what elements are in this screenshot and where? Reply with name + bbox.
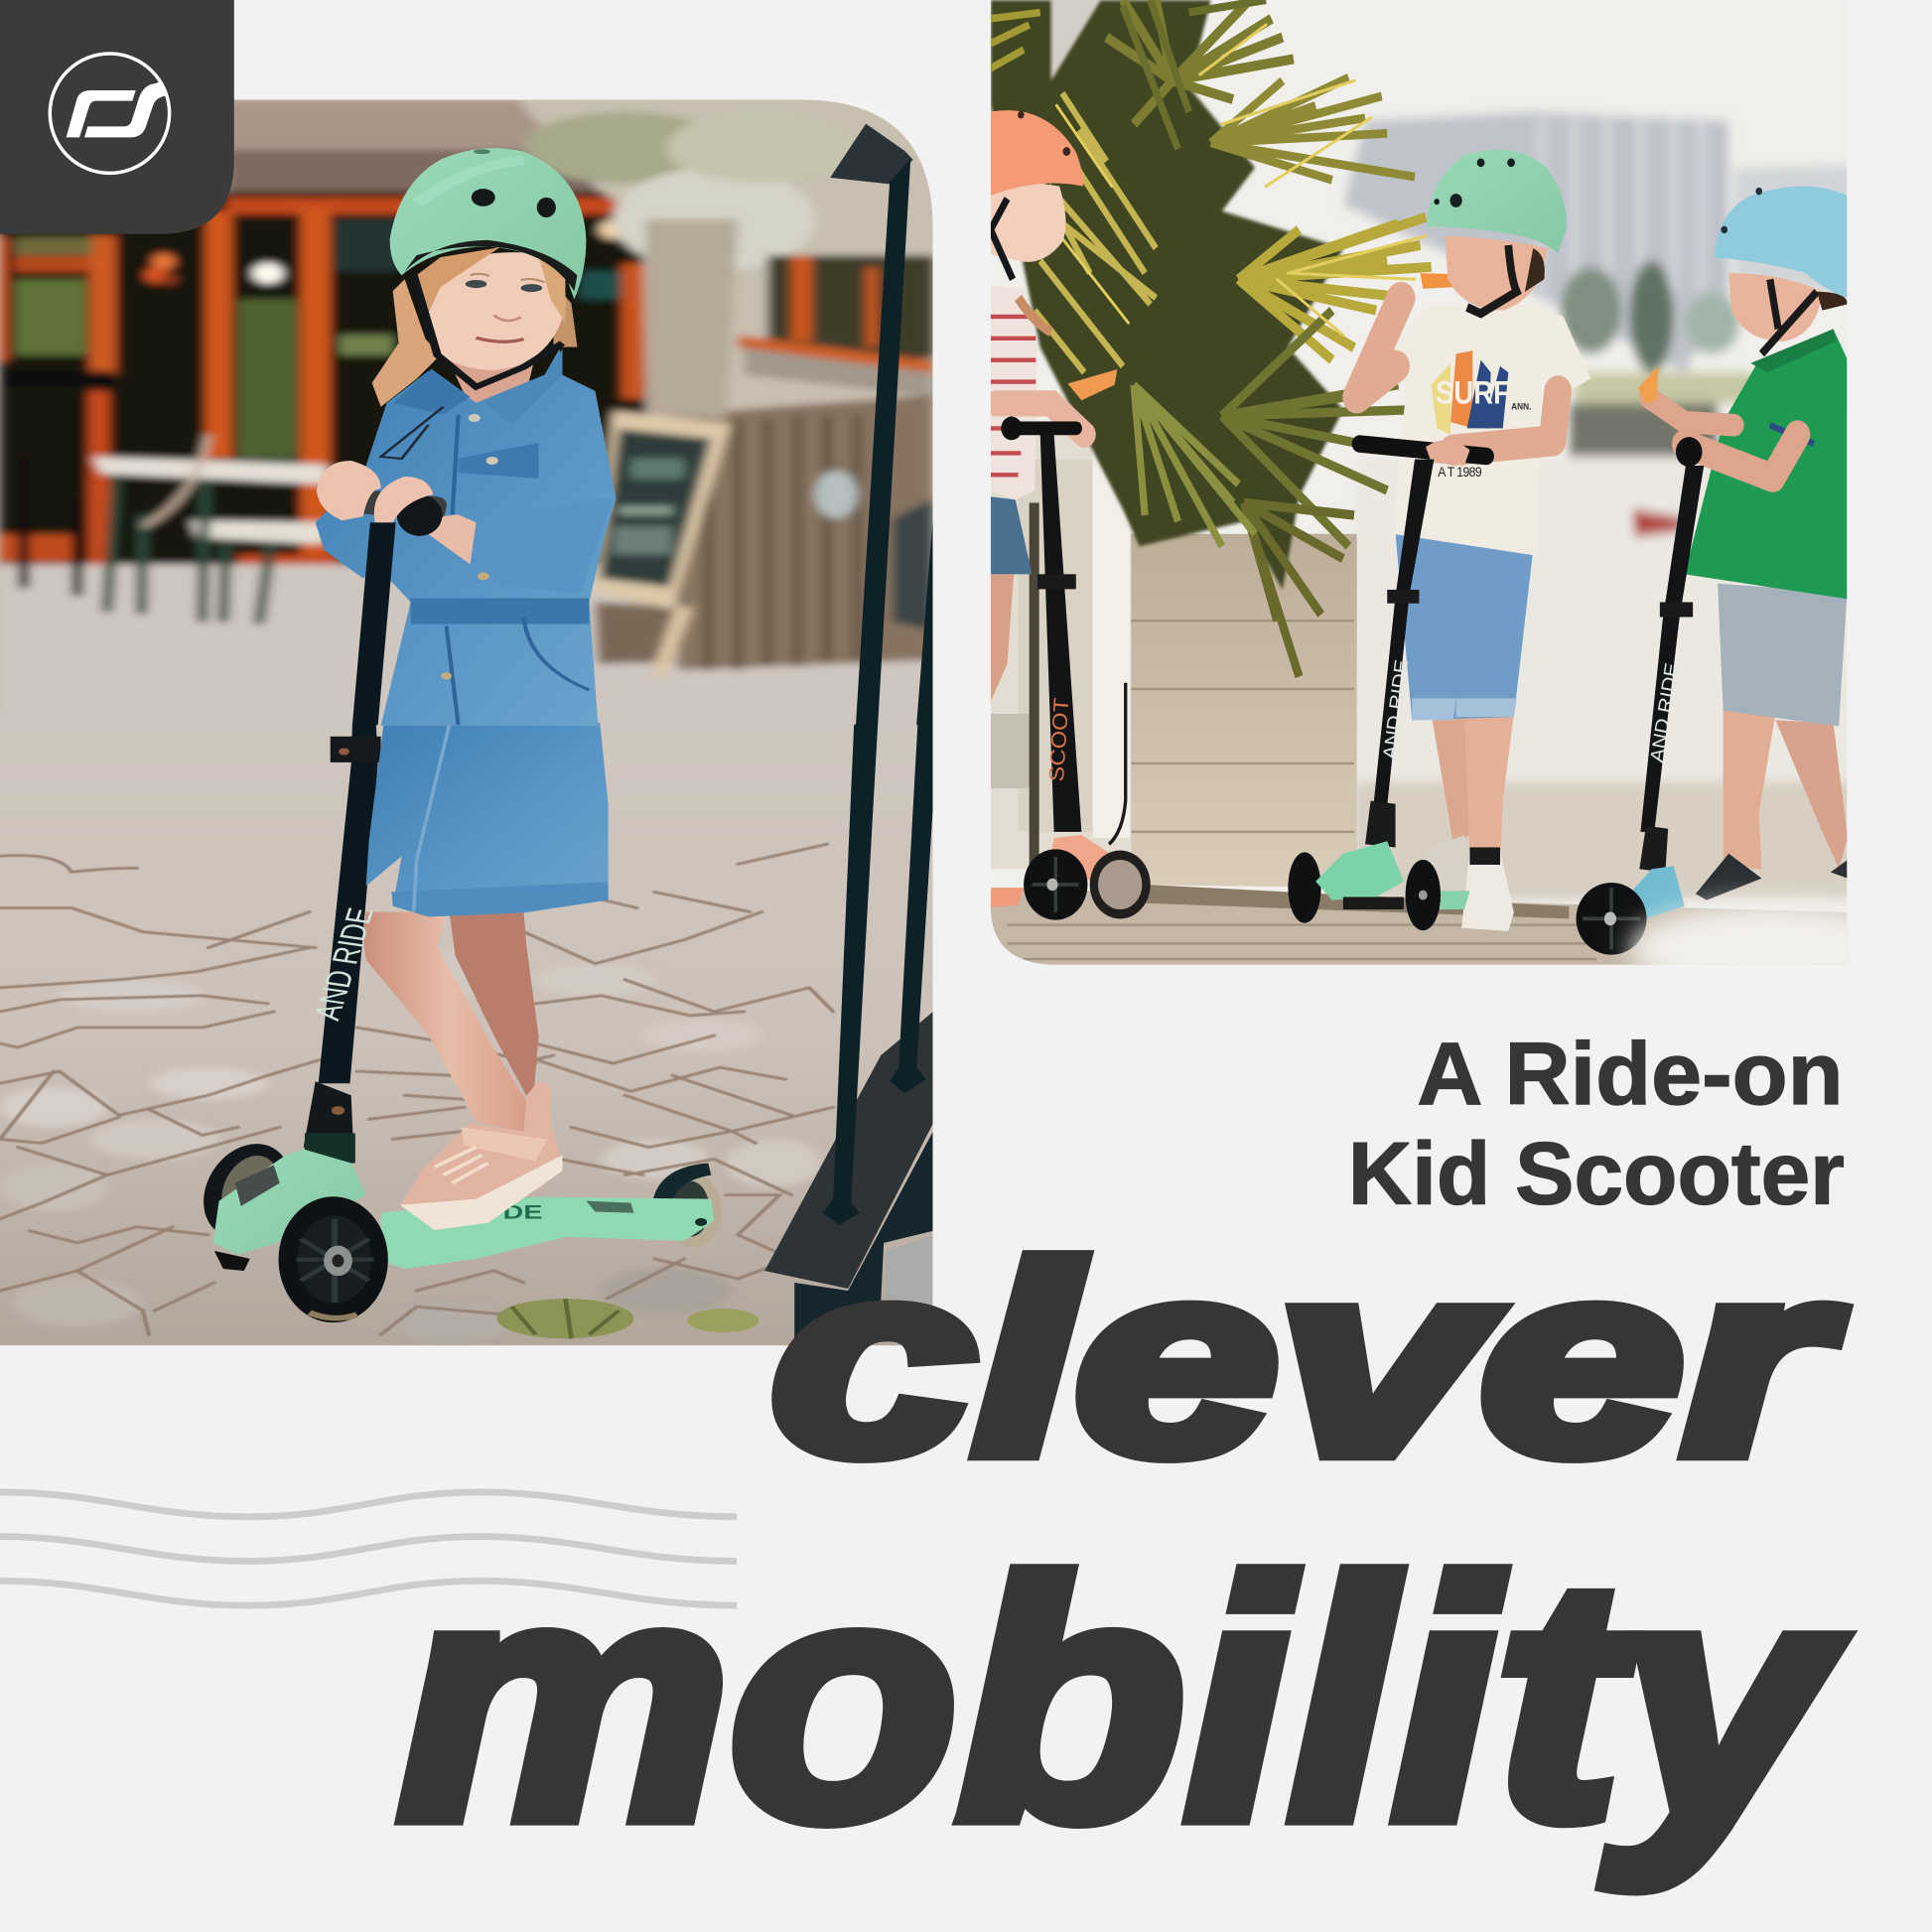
mint scooter xyxy=(1288,440,1486,930)
blue scooter xyxy=(1577,437,1704,955)
palm shadow mass xyxy=(991,0,1343,590)
left girl xyxy=(991,183,1117,702)
dark metal railing and steps xyxy=(764,124,933,1349)
decorative wavy lines xyxy=(0,1492,737,1605)
badge background xyxy=(0,0,234,234)
fork head xyxy=(213,1149,366,1271)
right boy: head and blue helmet xyxy=(1715,187,1848,353)
stone tone patches xyxy=(0,948,821,1342)
rear-left wheel xyxy=(204,1144,284,1230)
palm plant xyxy=(991,0,1432,677)
middle boy: shirt and arms: SURF xyxy=(1436,374,1510,411)
front wheel xyxy=(279,1196,388,1322)
coral scooter: SCOOT xyxy=(1044,697,1073,782)
subheading: A Ride-on xyxy=(1417,1024,1844,1123)
logo badge xyxy=(0,0,234,234)
photo: three children with scooters xyxy=(991,0,1847,965)
headline: mobility: mobility xyxy=(398,1512,1847,1891)
foreground white haze xyxy=(1629,903,1916,997)
rear wheel and fender xyxy=(651,1164,722,1248)
middle boy: legs xyxy=(1396,534,1533,931)
right boy: legs xyxy=(1696,584,1848,900)
photo: cobblestone ground xyxy=(0,713,933,1349)
girl upper body xyxy=(316,148,616,726)
weeds xyxy=(497,1299,759,1338)
scooter front pole xyxy=(304,725,381,1164)
wooden planter xyxy=(1123,534,1569,918)
subheading: Kid Scooter xyxy=(1348,1124,1845,1223)
scooter front pole: AND RIDE xyxy=(307,905,381,1023)
deck xyxy=(381,1197,714,1269)
middle boy: shirt and arms: ANN. xyxy=(1511,401,1531,412)
face xyxy=(417,247,566,370)
right boy: green polo xyxy=(1638,329,1848,599)
white post and fence xyxy=(991,0,1131,869)
boardwalk xyxy=(991,888,1847,965)
mint scooter: AND RIDE xyxy=(1380,658,1413,761)
blue scooter: AND RIDE xyxy=(1647,661,1683,764)
subheading xyxy=(1348,1024,1845,1223)
girl with scooter, lower half xyxy=(192,723,722,1322)
front arm and handlebar xyxy=(317,461,477,725)
palm frond fans xyxy=(991,0,1432,677)
photo background: cafe upper xyxy=(0,100,933,725)
benches xyxy=(24,435,328,624)
photo: girl on mint scooter xyxy=(0,100,933,1349)
mint helmet xyxy=(390,148,586,299)
neck xyxy=(449,355,535,403)
skirt hem xyxy=(366,723,609,916)
coral scooter xyxy=(991,417,1151,920)
middle boy: shirt and arms xyxy=(1357,273,1591,556)
middle boy: shirt and arms: A T 1989 xyxy=(1438,464,1482,480)
logo glyph xyxy=(67,81,166,137)
shoe xyxy=(400,1081,562,1230)
blurred background: sky, buildings, water xyxy=(1337,103,1847,905)
hair xyxy=(372,279,577,407)
deck: DE xyxy=(503,1202,542,1223)
middle boy: head and mint helmet xyxy=(1427,150,1567,314)
logo ring xyxy=(50,54,170,173)
legs xyxy=(363,912,538,1135)
headline: clever: clever xyxy=(771,1210,1843,1510)
coral helmet xyxy=(991,110,1083,196)
palm highlights xyxy=(1045,25,1426,336)
helmet straps xyxy=(414,275,562,387)
denim dress xyxy=(316,349,616,726)
